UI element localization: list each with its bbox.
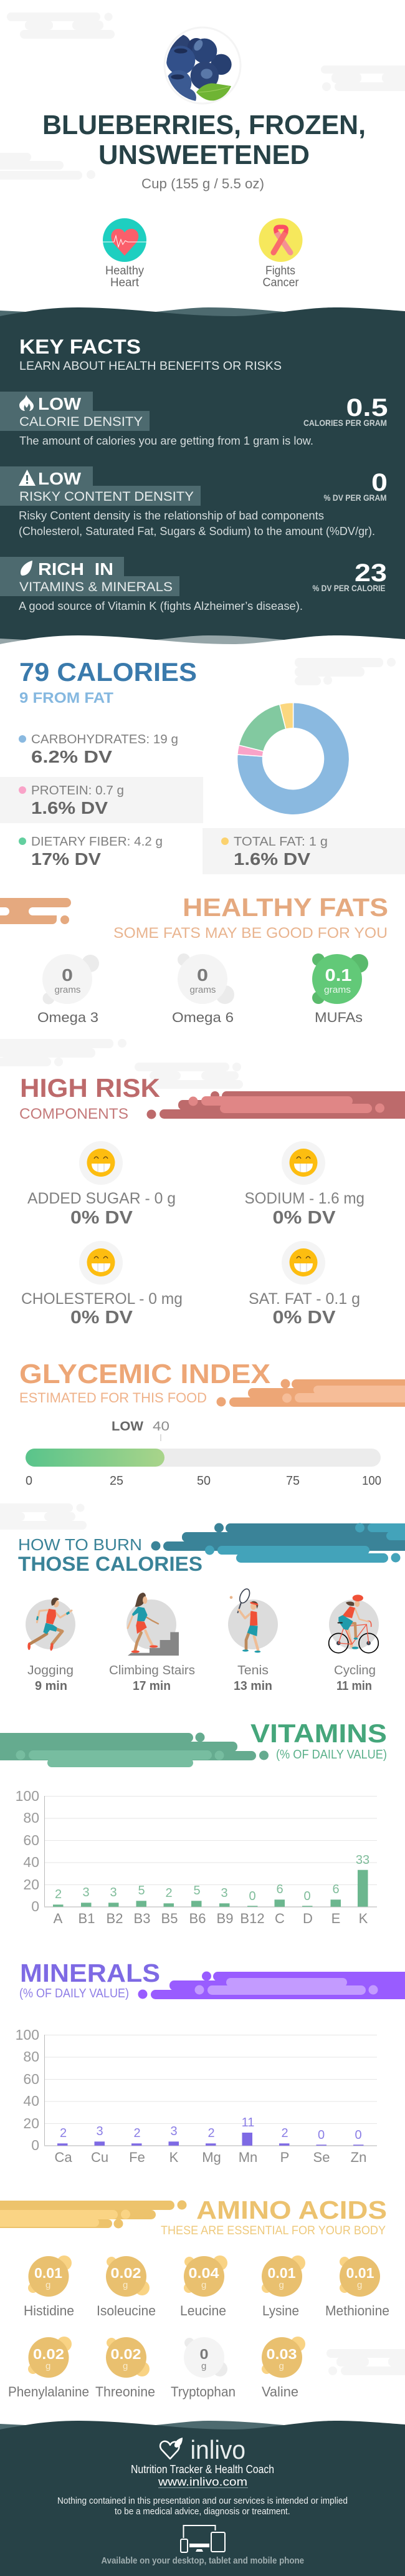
title: UNSWEETENED [98, 140, 310, 170]
bar chart: minerals: Zn [351, 2149, 366, 2165]
amino: phenylalanine: g [45, 2361, 50, 2371]
logo: inlivo [160, 2435, 245, 2464]
bar chart: vitamins: E [331, 1911, 340, 1926]
bar chart: minerals: Mn [239, 2149, 257, 2165]
title: BLUEBERRIES, FROZEN, [42, 110, 366, 140]
amino: methionine: Methionine [325, 2303, 389, 2318]
fact: calorie density [0, 392, 388, 447]
label: jogging [27, 1664, 74, 1693]
bar chart: minerals: 0 [318, 2128, 325, 2142]
item: added sugar: 0% DV [70, 1208, 133, 1228]
label: tennis [234, 1664, 272, 1693]
amino: methionine [325, 2256, 389, 2318]
heading: amino acids [161, 2196, 387, 2237]
gauge axis labels: 50 [197, 1474, 211, 1488]
amino: threonine: g [123, 2361, 128, 2371]
fact: rich in vitamins and minerals: % DV PER CALORIE [313, 583, 385, 593]
label: climbing stairs: 17 min [133, 1679, 171, 1693]
gauge axis labels: 0 [26, 1474, 32, 1488]
fact: calorie density: CALORIE DENSITY [19, 415, 143, 429]
bar chart: minerals: 3 [96, 2125, 103, 2138]
label: fights cancer: Cancer [263, 276, 299, 289]
stat: omega 3 [37, 954, 99, 1025]
amino: valine: Valine [262, 2384, 298, 2400]
stat: omega 3: Omega 3 [37, 1010, 98, 1025]
label: fights cancer: Fights [265, 264, 295, 277]
donut chart [237, 703, 350, 815]
fact: risky content density: RISKY CONTENT DENSITY [19, 490, 194, 504]
bar chart: minerals: 3 [170, 2125, 178, 2138]
stat: mufas: grams [324, 985, 351, 995]
bar chart: minerals: Fe [129, 2149, 145, 2165]
amino: phenylalanine [8, 2337, 89, 2400]
item: saturated fat [249, 1241, 360, 1328]
amino: valine [262, 2337, 305, 2400]
footer tagline and url [131, 2463, 274, 2488]
item: saturated fat: 0% DV [273, 1308, 336, 1328]
gauge axis labels: 100 [362, 1474, 381, 1488]
amino: lysine: g [279, 2280, 284, 2290]
decoration: glycemic stripes [217, 1379, 405, 1407]
image: bowl of blueberries [164, 27, 241, 107]
gauge: glycemic value: 40 [153, 1419, 169, 1434]
heading: healthy fats: SOME FATS MAY BE GOOD FOR YOU [113, 925, 388, 942]
stat: omega 3: 0 [62, 965, 73, 985]
label: cycling: 11 min [336, 1679, 372, 1693]
stat: omega 6: grams [189, 985, 216, 995]
decoration: vitamin stripes [0, 1732, 269, 1767]
decoration: burn stripes [151, 1523, 405, 1563]
heading: amino acids: AMINO ACIDS [196, 2196, 387, 2224]
item: cholesterol [21, 1241, 183, 1328]
bar chart: vitamins: B2 [107, 1911, 123, 1926]
label: cycling [334, 1664, 376, 1693]
fact: risky content density: 0 [371, 469, 388, 496]
stat: mufas [312, 953, 368, 1025]
fact: calorie density: CALORIES PER GRAM [303, 418, 387, 428]
heading: healthy fats: HEALTHY FATS [183, 893, 388, 922]
heading: vitamins [250, 1719, 387, 1762]
row: dietary fiber: DIETARY FIBER: 4.2 g [31, 835, 163, 849]
bar chart: vitamins: B5 [161, 1911, 178, 1926]
amino: isoleucine: Isoleucine [97, 2303, 156, 2318]
bar chart: minerals: 11 [242, 2116, 254, 2130]
decoration: mineral stripes [138, 1972, 405, 1999]
amino: isoleucine: g [123, 2280, 128, 2290]
bar chart: vitamins: 40 [23, 1854, 39, 1870]
heading: high risk [19, 1073, 160, 1122]
fact: calorie density: The amount of calories you are getting from 1 gram is low. [19, 435, 313, 447]
row: carbohydrates: CARBOHYDRATES: 19 g [31, 733, 178, 746]
amino: threonine: Threonine [95, 2384, 155, 2400]
gauge: glycemic value: LOW [112, 1419, 143, 1434]
panel: minerals [16, 1959, 405, 2165]
stat: omega 6: 0 [197, 965, 208, 985]
amino: threonine: 0.02 [111, 2346, 141, 2362]
amino: histidine [24, 2255, 74, 2318]
amino: histidine: Histidine [24, 2303, 74, 2318]
availability note: Available on your desktop, tablet and mobile phone [101, 2555, 304, 2566]
decoration: amino stripes [0, 2200, 187, 2229]
bar chart: vitamins: B9 [217, 1911, 233, 1926]
bar chart: vitamins: 3 [221, 1886, 228, 1900]
fact: rich in vitamins and minerals: RICH IN [38, 559, 113, 579]
bar chart: vitamins: 33 [356, 1853, 369, 1867]
label: jogging: Jogging [27, 1664, 74, 1677]
stat: mufas: 0.1 [325, 965, 351, 985]
panel: healthy fats [0, 893, 388, 1025]
bar chart: minerals: 80 [23, 2048, 39, 2065]
heading: key facts: LEARN ABOUT HEALTH BENEFITS OR RISKS [19, 360, 282, 373]
heading: vitamins: VITAMINS [250, 1719, 387, 1748]
amino: valine: g [279, 2361, 284, 2371]
amino: tryptophan: Tryptophan [171, 2384, 236, 2400]
icon: fights cancer ribbon [259, 218, 303, 262]
amino: threonine [95, 2337, 155, 2400]
icon: healthy heart [103, 218, 146, 262]
fact: risky content density: (Cholesterol, Saturated Fat, Sugars & Sodium) to the amount (%DV/gr). [19, 525, 375, 538]
row: carbohydrates: 6.2% DV [31, 747, 112, 766]
bar chart: minerals: 0 [355, 2128, 362, 2142]
fact: calorie density: LOW [38, 394, 82, 413]
decoration: healthy fats stripes [0, 898, 72, 924]
gauge: glycemic value [26, 1419, 381, 1467]
item: sodium: SODIUM - 1.6 mg [244, 1190, 364, 1207]
bar chart: minerals: Ca [54, 2149, 72, 2165]
bar chart: minerals: 100 [16, 2027, 39, 2043]
bar chart: vitamins: 6 [276, 1883, 284, 1896]
heading: how to burn: THOSE CALORIES [18, 1553, 202, 1575]
amino: tryptophan: 0 [199, 2346, 208, 2362]
bar chart: vitamins: 3 [82, 1886, 90, 1899]
disclaimer: to be a medical advice, diagnosis or treatment. [115, 2506, 290, 2517]
amino: leucine: 0.04 [188, 2265, 219, 2281]
bar chart: minerals: 0 [31, 2137, 39, 2153]
label: healthy heart: Heart [110, 276, 140, 289]
row: protein: 1.6% DV [31, 798, 108, 818]
amino: methionine: g [357, 2280, 362, 2290]
panel: calories [0, 657, 405, 874]
amino: lysine: Lysine [262, 2303, 299, 2318]
item: saturated fat: SAT. FAT - 0.1 g [249, 1290, 360, 1308]
heading: minerals [19, 1959, 160, 2000]
bar chart: vitamins: 0 [303, 1889, 311, 1903]
row: total fat: 1.6% DV [234, 849, 310, 869]
label: jogging: 9 min [35, 1679, 67, 1693]
item: cholesterol: CHOLESTEROL - 0 mg [21, 1290, 183, 1308]
panel: high risk components [0, 1039, 405, 1328]
activity: cycling [329, 1594, 379, 1653]
bar chart: minerals: Mg [202, 2149, 221, 2165]
disclaimer [57, 2496, 348, 2517]
bar chart: vitamins: D [303, 1911, 313, 1926]
bar chart: minerals: Cu [91, 2149, 108, 2165]
fact: risky content density [0, 466, 388, 538]
fact: rich in vitamins and minerals [0, 557, 387, 612]
row: dietary fiber [19, 835, 163, 869]
heading: vitamins: (% OF DAILY VALUE) [276, 1748, 387, 1762]
amino: lysine: 0.01 [268, 2265, 296, 2281]
bar chart: vitamins: 2 [165, 1886, 173, 1900]
label: healthy heart [105, 264, 144, 289]
heading: key facts: KEY FACTS [19, 335, 141, 358]
label: cycling: Cycling [334, 1664, 376, 1677]
activity: jogging [26, 1598, 75, 1651]
heading: glycemic index: GLYCEMIC INDEX [19, 1359, 270, 1389]
fact: rich in vitamins and minerals: A good source of Vitamin K (fights Alzheimer’s disease). [19, 600, 303, 612]
label: climbing stairs [109, 1664, 195, 1693]
fact: calorie density: 0.5 [346, 394, 388, 422]
activity: climbing stairs [126, 1593, 179, 1656]
row: dietary fiber: 17% DV [31, 849, 101, 869]
heading: glycemic index: ESTIMATED FOR THIS FOOD [19, 1390, 207, 1406]
gauge axis labels: 25 [110, 1474, 123, 1488]
amino: leucine [180, 2255, 227, 2318]
amino: histidine: g [45, 2280, 50, 2290]
title [42, 110, 366, 170]
fact: rich in vitamins and minerals: VITAMINS & MINERALS [19, 580, 173, 594]
amino: isoleucine [97, 2256, 156, 2318]
bar chart: vitamins: 60 [23, 1832, 39, 1848]
bar chart: minerals: 2 [207, 2126, 215, 2140]
bar chart: minerals: P [280, 2149, 289, 2165]
heading: high risk: COMPONENTS [19, 1106, 128, 1122]
bar chart: vitamins: 6 [332, 1883, 340, 1896]
serving size: Cup (155 g / 5.5 oz) [141, 176, 264, 191]
amino: tryptophan [171, 2337, 236, 2400]
bar chart: minerals: 20 [23, 2115, 39, 2131]
bar chart: vitamins: 5 [193, 1884, 201, 1898]
bar chart: minerals: 60 [23, 2071, 39, 2087]
amino: phenylalanine: Phenylalanine [8, 2384, 89, 2400]
fact: risky content density: LOW [38, 469, 82, 488]
bar chart: minerals [16, 2027, 377, 2165]
bar chart: vitamins: 0 [31, 1898, 39, 1914]
bar chart: vitamins [16, 1788, 377, 1926]
amino: leucine: Leucine [180, 2303, 226, 2318]
heading: minerals: MINERALS [20, 1959, 160, 1987]
bar chart: vitamins: 3 [110, 1886, 117, 1899]
bar chart: vitamins: 0 [249, 1889, 256, 1903]
heading: how to burn: HOW TO BURN [18, 1535, 142, 1554]
panel: glycemic index [19, 1359, 405, 1488]
bar chart: vitamins: B6 [189, 1911, 206, 1926]
amino: methionine: 0.01 [346, 2265, 374, 2281]
item: sodium: 0% DV [273, 1208, 336, 1228]
amino: valine: 0.03 [267, 2346, 297, 2362]
panel: how to burn those calories [0, 1503, 405, 1693]
bar chart: vitamins: B3 [134, 1911, 150, 1926]
disclaimer: Nothing contained in this presentation and our services is intended or implied [57, 2496, 348, 2506]
fact: risky content density: Risky Content density is the relationship of bad components [19, 509, 324, 522]
row: protein: PROTEIN: 0.7 g [31, 784, 124, 798]
background clouds: header [0, 12, 405, 180]
label: tennis: 13 min [234, 1679, 272, 1693]
bar chart: vitamins: 80 [23, 1810, 39, 1826]
fact: risky content density: % DV PER GRAM [324, 493, 386, 503]
stat: omega 6 [172, 953, 234, 1025]
panel: key facts [0, 307, 405, 655]
row: protein [0, 777, 203, 823]
amino: lysine [262, 2255, 305, 2318]
panel: amino acids [0, 2196, 405, 2400]
bar chart: minerals: K [169, 2149, 179, 2165]
bar chart: minerals: 2 [133, 2126, 141, 2140]
bar chart: vitamins: 2 [55, 1888, 62, 1901]
item: sodium [244, 1141, 364, 1228]
heading: calories [19, 657, 197, 707]
gauge axis labels: 75 [286, 1474, 300, 1488]
heading: high risk: HIGH RISK [20, 1073, 160, 1102]
bar chart: vitamins: C [275, 1911, 285, 1926]
label: climbing stairs: Climbing Stairs [109, 1664, 195, 1677]
amino: isoleucine: 0.02 [111, 2265, 141, 2281]
label: healthy heart: Healthy [105, 264, 144, 277]
amino: phenylalanine: 0.02 [33, 2346, 64, 2362]
row: total fat [202, 828, 405, 874]
amino: leucine: g [201, 2280, 206, 2290]
activity: tennis [228, 1588, 278, 1652]
bar chart: vitamins: A [54, 1911, 63, 1926]
item: added sugar: ADDED SUGAR - 0 g [27, 1190, 176, 1207]
heading: glycemic index [19, 1359, 270, 1406]
stat: omega 6: Omega 6 [172, 1010, 234, 1025]
amino: tryptophan: g [201, 2361, 206, 2371]
bar chart: vitamins: B1 [79, 1911, 95, 1926]
stat: mufas: MUFAs [315, 1010, 363, 1025]
fact: rich in vitamins and minerals: 23 [355, 559, 387, 587]
bar chart: vitamins: 20 [23, 1876, 39, 1893]
bar chart: vitamins: K [359, 1911, 368, 1926]
item: cholesterol: 0% DV [70, 1308, 133, 1328]
panel: footer [0, 2421, 405, 2576]
heading: key facts [19, 335, 282, 373]
heading: calories: 9 FROM FAT [19, 690, 113, 707]
heading: minerals: (% OF DAILY VALUE) [19, 1987, 129, 2000]
item: added sugar [27, 1141, 176, 1228]
heading: amino acids: THESE ARE ESSENTIAL FOR YOUR BODY [161, 2224, 386, 2237]
heading: how to burn [18, 1535, 202, 1575]
bar chart: vitamins: 5 [138, 1884, 145, 1898]
label: fights cancer [263, 264, 299, 289]
bar chart: minerals: 2 [281, 2126, 288, 2140]
bar chart: minerals: 40 [23, 2093, 39, 2109]
row: carbohydrates [19, 733, 178, 766]
bar chart: vitamins: 100 [16, 1788, 39, 1804]
decoration: high risk stripes [147, 1091, 405, 1119]
bar chart: vitamins: B12 [240, 1911, 265, 1926]
gauge axis labels [26, 1474, 381, 1488]
panel: vitamins [0, 1719, 387, 1926]
bar chart: minerals: 2 [60, 2126, 67, 2140]
footer tagline and url: www.inlivo.com [158, 2476, 247, 2488]
label: tennis: Tenis [237, 1664, 269, 1677]
heading: healthy fats [113, 893, 388, 942]
row: total fat: TOTAL FAT: 1 g [234, 835, 328, 849]
bar chart: minerals: Se [313, 2149, 330, 2165]
heading: calories: 79 CALORIES [19, 657, 197, 687]
footer tagline and url: Nutrition Tracker & Health Coach [131, 2463, 274, 2476]
logo: inlivo: inlivo [191, 2435, 245, 2464]
amino: histidine: 0.01 [34, 2265, 62, 2281]
icon: devices [181, 2525, 225, 2552]
stat: omega 3: grams [55, 985, 81, 995]
